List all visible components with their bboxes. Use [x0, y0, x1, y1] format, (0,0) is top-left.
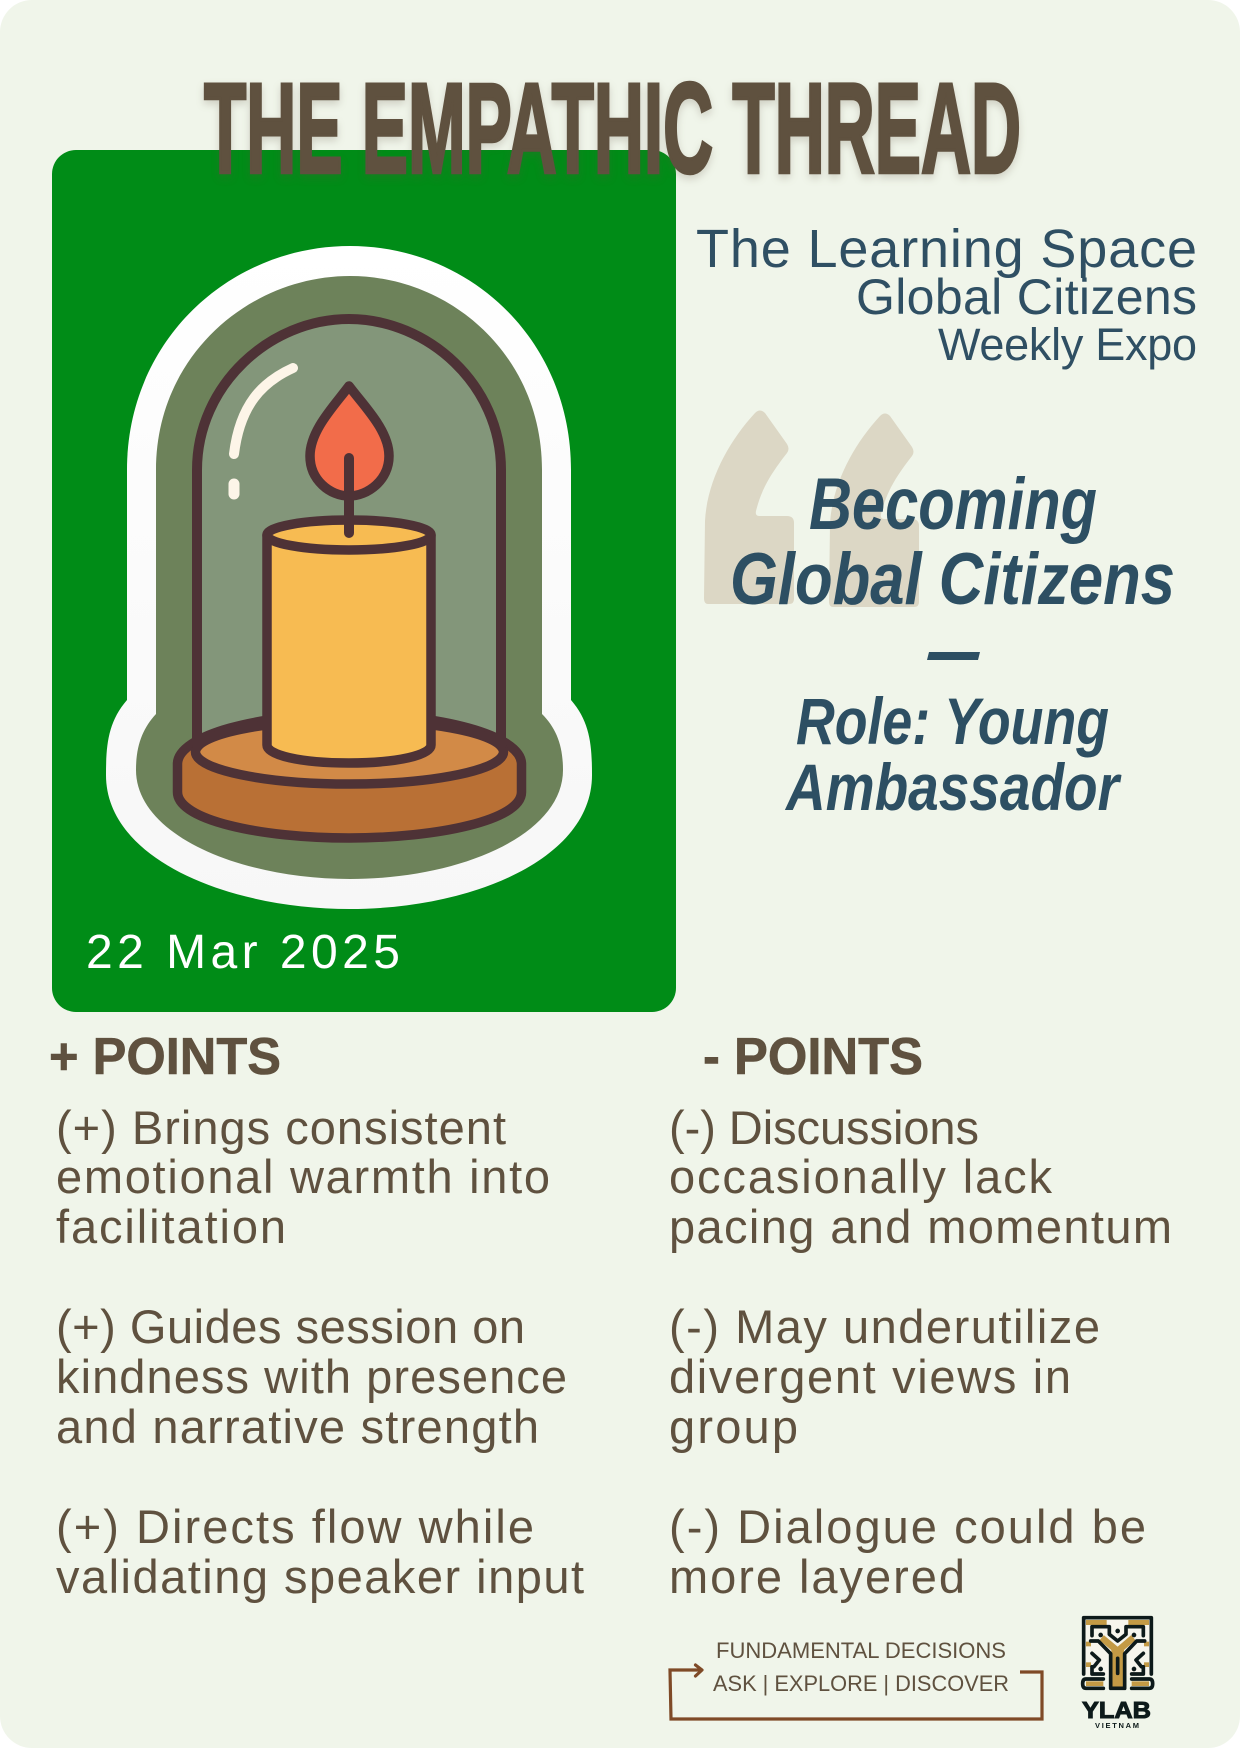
headline: Becoming Global Citizens: [730, 464, 1175, 620]
heading: minus points: - POINTS: [703, 1028, 923, 1086]
footer tagline: [713, 1638, 1009, 1696]
list: minus points: occasionally lack: [669, 1150, 1052, 1203]
list: plus points: facilitation: [56, 1200, 286, 1253]
subtitle block: Global Citizens: [856, 269, 1197, 325]
list: plus points: validating speaker input: [56, 1550, 584, 1603]
role text: Ambassador: [784, 750, 1122, 824]
list: minus points: group: [669, 1400, 798, 1453]
list: minus points: (-) Discussions: [669, 1101, 979, 1154]
list: minus points: more layered: [669, 1550, 965, 1603]
list: plus points: kindness with presence: [56, 1350, 567, 1403]
logo: YLAB Vietnam: VIETNAM: [1095, 1721, 1139, 1730]
list: minus points: [669, 1101, 1172, 1603]
role text: Role: Young: [796, 684, 1109, 758]
list: plus points: (+) Directs flow while: [56, 1500, 534, 1553]
list: plus points: (+) Brings consistent: [56, 1101, 506, 1154]
list: plus points: emotional warmth into: [56, 1150, 550, 1203]
panel: green image card: [52, 150, 676, 1012]
footer tagline: FUNDAMENTAL DECISIONS: [716, 1638, 1006, 1663]
list: minus points: (-) Dialogue could be: [669, 1500, 1146, 1553]
heading: plus points: + POINTS: [49, 1028, 281, 1086]
role text: [784, 684, 1122, 824]
list: minus points: divergent views in: [669, 1350, 1071, 1403]
headline: Becoming Global Citizens: Becoming: [809, 464, 1097, 545]
logo: YLAB Vietnam: [1082, 1618, 1153, 1730]
subtitle block: Weekly Expo: [938, 319, 1197, 370]
footer tagline: ASK | EXPLORE | DISCOVER: [713, 1671, 1009, 1696]
list: plus points: [56, 1101, 584, 1603]
arrow: loop around tagline: [670, 1665, 1042, 1719]
list: plus points: (+) Guides session on: [56, 1300, 525, 1353]
list: minus points: pacing and momentum: [669, 1200, 1172, 1253]
list: minus points: (-) May underutilize: [669, 1300, 1100, 1353]
dash divider: [927, 652, 980, 660]
subtitle block: The Learning Space: [696, 219, 1197, 279]
icon: quotation mark: [704, 410, 919, 607]
subtitle block: [696, 219, 1197, 370]
icon: candle under glass dome: [106, 246, 592, 909]
list: plus points: and narrative strength: [56, 1400, 539, 1453]
date label: 22 Mar 2025: [86, 926, 400, 979]
logo: YLAB Vietnam: YLAB: [1082, 1697, 1151, 1723]
